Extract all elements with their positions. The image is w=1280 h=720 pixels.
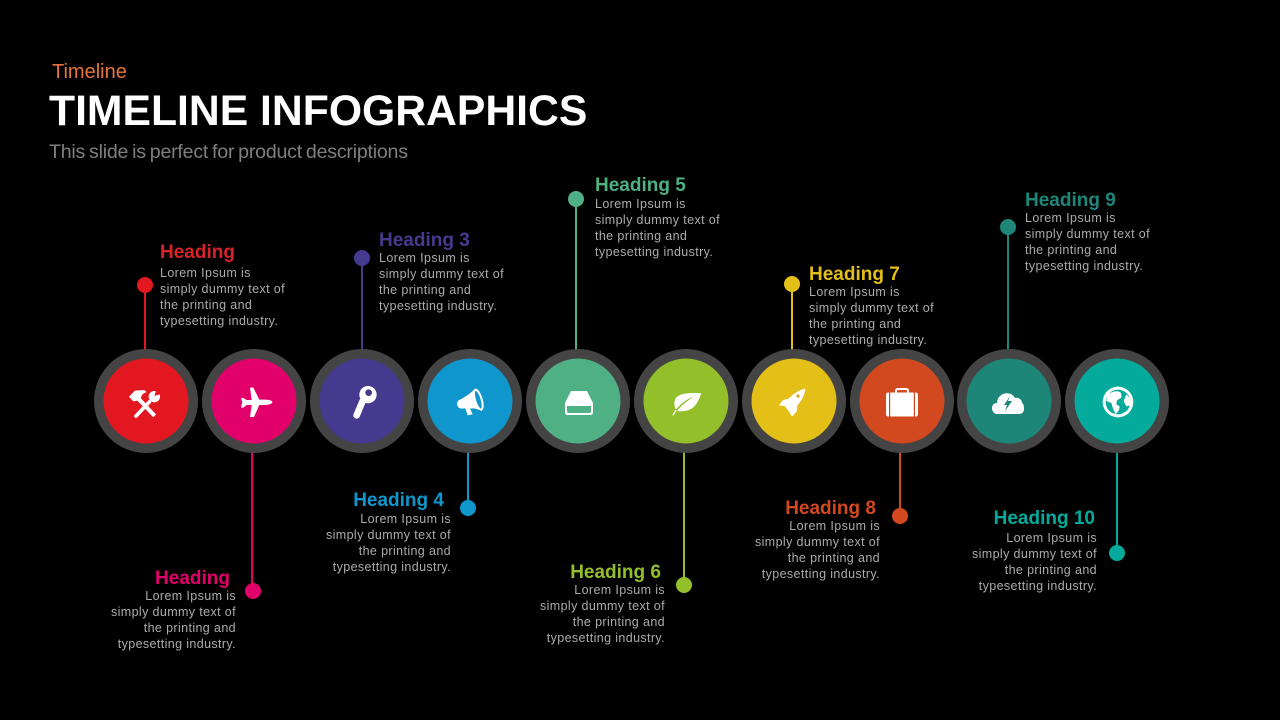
icon: rocket bbox=[779, 389, 805, 417]
heading and text: simply dummy text of bbox=[755, 535, 880, 549]
node circle bbox=[1065, 349, 1169, 453]
icon: globe bbox=[1103, 387, 1133, 417]
node circle bbox=[634, 349, 738, 453]
node circle bbox=[957, 349, 1061, 453]
heading and text: typesetting industry. bbox=[160, 314, 278, 328]
heading and text: simply dummy text of bbox=[595, 213, 720, 227]
heading and text: Lorem Ipsum is bbox=[1006, 531, 1097, 545]
heading and text: typesetting industry. bbox=[118, 637, 236, 651]
stem and dot bbox=[892, 451, 908, 524]
stem and dot bbox=[460, 451, 476, 516]
heading and text: the printing and bbox=[144, 621, 236, 635]
heading and text: Heading 7 bbox=[809, 264, 900, 285]
heading and text: typesetting industry. bbox=[762, 567, 880, 581]
heading and text: the printing and bbox=[788, 551, 880, 565]
stem and dot bbox=[354, 250, 370, 351]
stem and dot bbox=[1000, 219, 1016, 351]
node circle bbox=[850, 349, 954, 453]
heading and text: the printing and bbox=[379, 283, 471, 297]
heading and text: Heading 3 bbox=[379, 230, 470, 251]
heading and text: Heading bbox=[155, 568, 230, 589]
heading and text: Lorem Ipsum is bbox=[1025, 211, 1116, 225]
step 3: purple, key bbox=[310, 230, 504, 453]
heading and text: simply dummy text of bbox=[1025, 227, 1150, 241]
heading and text: Lorem Ipsum is bbox=[574, 583, 665, 597]
heading and text: Heading 5 bbox=[595, 175, 686, 196]
title: TIMELINE INFOGRAPHICS bbox=[49, 87, 587, 135]
heading and text: Heading bbox=[160, 242, 235, 263]
step 4: blue, megaphone bbox=[326, 349, 522, 574]
heading and text: typesetting industry. bbox=[333, 560, 451, 574]
node circle bbox=[418, 349, 522, 453]
stem and dot bbox=[245, 451, 261, 599]
icon: leaf bbox=[673, 393, 701, 415]
icon: plane bbox=[241, 388, 272, 417]
heading and text: typesetting industry. bbox=[979, 579, 1097, 593]
icon: hammer and wrench bbox=[129, 389, 163, 417]
icon: cloud with lightning bbox=[992, 393, 1024, 414]
node circle bbox=[310, 349, 414, 453]
icon: hard drive bbox=[565, 391, 593, 415]
heading and text bbox=[326, 490, 451, 574]
heading and text: Lorem Ipsum is bbox=[789, 519, 880, 533]
step 5: green, hard drive bbox=[526, 175, 720, 453]
heading and text bbox=[809, 264, 934, 347]
heading and text: simply dummy text of bbox=[809, 301, 934, 315]
heading and text: Lorem Ipsum is bbox=[595, 197, 686, 211]
stem and dot bbox=[1109, 451, 1125, 561]
heading and text: Lorem Ipsum is bbox=[360, 512, 451, 526]
heading and text: the printing and bbox=[1005, 563, 1097, 577]
heading and text: typesetting industry. bbox=[547, 631, 665, 645]
step 7: yellow, rocket bbox=[742, 264, 934, 453]
node circle bbox=[526, 349, 630, 453]
heading and text: simply dummy text of bbox=[540, 599, 665, 613]
stem and dot bbox=[137, 277, 153, 351]
heading and text bbox=[111, 568, 236, 651]
step 8: orange, briefcase bbox=[755, 349, 954, 581]
heading and text bbox=[379, 230, 504, 313]
heading and text: Lorem Ipsum is bbox=[145, 589, 236, 603]
heading and text: simply dummy text of bbox=[379, 267, 504, 281]
subtitle: This slide is perfect for product descriptions bbox=[49, 141, 408, 163]
step 6: lime, leaf bbox=[540, 349, 738, 645]
heading and text: Heading 10 bbox=[994, 508, 1095, 529]
step 1: red, tools bbox=[94, 242, 285, 453]
heading and text: Heading 9 bbox=[1025, 190, 1116, 211]
heading and text: the printing and bbox=[1025, 243, 1117, 257]
heading and text: the printing and bbox=[573, 615, 665, 629]
heading and text bbox=[1025, 190, 1150, 273]
heading and text: simply dummy text of bbox=[160, 282, 285, 296]
step 9: teal, storm cloud bbox=[957, 190, 1150, 453]
heading and text: Lorem Ipsum is bbox=[379, 251, 470, 265]
node circle bbox=[742, 349, 846, 453]
heading and text: the printing and bbox=[359, 544, 451, 558]
stem and dot bbox=[784, 276, 800, 351]
icon: key bbox=[357, 386, 377, 415]
label: Timeline: Timeline bbox=[52, 61, 127, 83]
heading and text: simply dummy text of bbox=[326, 528, 451, 542]
heading and text: Heading 6 bbox=[570, 562, 661, 583]
heading and text: typesetting industry. bbox=[809, 333, 927, 347]
heading and text: Lorem Ipsum is bbox=[809, 285, 900, 299]
icon: megaphone bbox=[457, 389, 485, 415]
heading and text: the printing and bbox=[809, 317, 901, 331]
step 10: sea green, globe bbox=[972, 349, 1169, 593]
heading and text bbox=[160, 242, 285, 328]
heading and text bbox=[755, 498, 880, 581]
heading and text: simply dummy text of bbox=[111, 605, 236, 619]
heading and text: simply dummy text of bbox=[972, 547, 1097, 561]
heading and text: Lorem Ipsum is bbox=[160, 266, 251, 280]
icon: briefcase bbox=[886, 388, 918, 416]
heading and text: Heading 4 bbox=[353, 490, 444, 511]
heading and text: typesetting industry. bbox=[1025, 259, 1143, 273]
heading and text: Heading 8 bbox=[785, 498, 876, 519]
heading and text bbox=[972, 508, 1097, 593]
node circle bbox=[94, 349, 198, 453]
stem and dot bbox=[568, 191, 584, 351]
node circle bbox=[202, 349, 306, 453]
step 2: pink, plane bbox=[111, 349, 306, 651]
heading and text: the printing and bbox=[160, 298, 252, 312]
heading and text: typesetting industry. bbox=[595, 245, 713, 259]
heading and text bbox=[595, 175, 720, 259]
heading and text bbox=[540, 562, 665, 645]
stem and dot bbox=[676, 451, 692, 593]
heading and text: the printing and bbox=[595, 229, 687, 243]
heading and text: typesetting industry. bbox=[379, 299, 497, 313]
